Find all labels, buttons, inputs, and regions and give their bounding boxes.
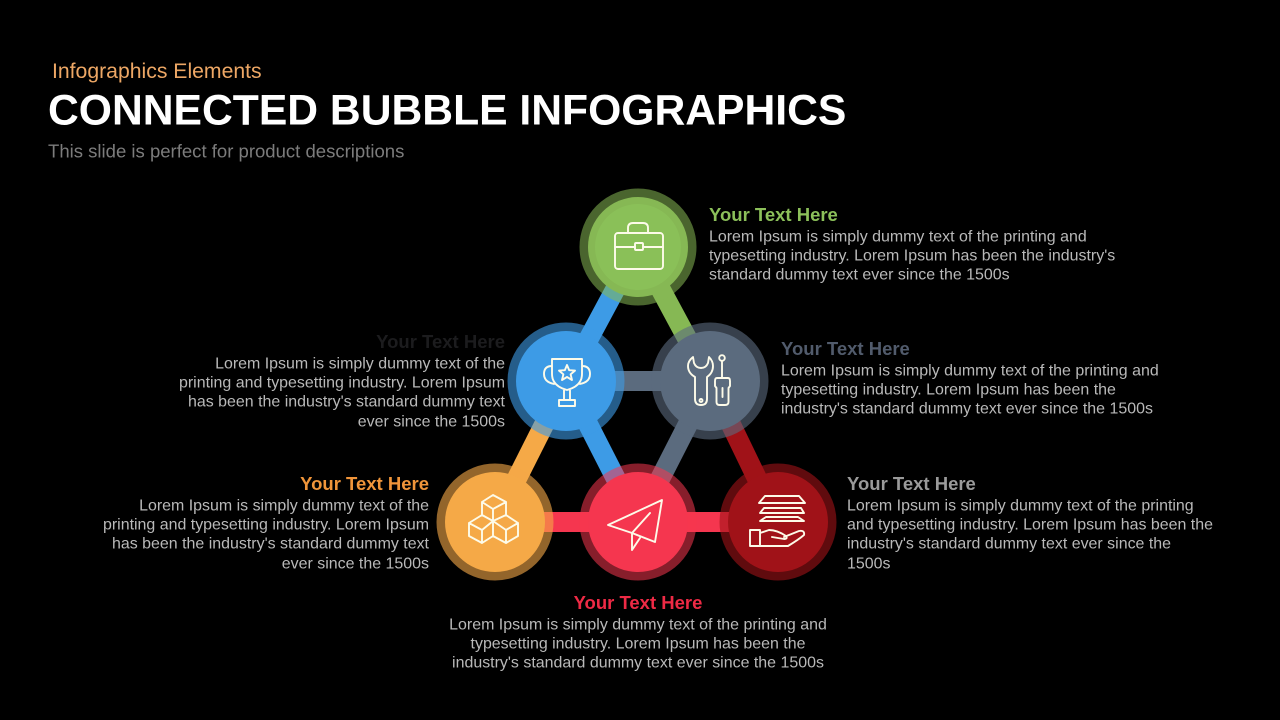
text block: blue: has been the industry's standard dummy text — [188, 394, 506, 410]
bubble: red — [584, 468, 692, 576]
text block: grey: Lorem Ipsum is simply dummy text of the printing and — [781, 362, 1159, 380]
icon: cubes — [469, 495, 518, 543]
text block: orange: has been the industry's standard dummy text — [112, 536, 430, 552]
text block: red: typesetting industry. Lorem Ipsum has been the — [471, 636, 806, 652]
bubble: blue — [512, 327, 620, 435]
text block: blue: printing and typesetting industry. Lorem Ipsum — [179, 374, 505, 392]
text block: blue: Lorem Ipsum is simply dummy text of the — [215, 356, 505, 372]
text block: red — [449, 592, 827, 672]
icon: hand holding layers — [750, 496, 805, 546]
bubble: grey — [656, 327, 764, 435]
text block: dark red: Lorem Ipsum is simply dummy text of the printing — [847, 498, 1194, 514]
text block: red: Lorem Ipsum is simply dummy text of the printing and — [449, 616, 827, 634]
text block: blue: ever since the 1500s — [358, 414, 505, 430]
text block: green: standard dummy text ever since the 1500s — [709, 266, 1010, 284]
icon: paper plane — [608, 500, 662, 550]
text block: red: industry's standard dummy text ever since the 1500s — [452, 654, 824, 672]
title: CONNECTED BUBBLE INFOGRAPHICS — [48, 86, 846, 134]
text block: dark red — [847, 473, 1213, 572]
connectors — [495, 247, 778, 522]
text block: green: Your Text Here — [709, 204, 838, 225]
icon: wrench and screwdriver — [688, 355, 730, 405]
connected bubble diagram — [441, 193, 832, 576]
text block: grey — [781, 338, 1159, 418]
bubble: orange — [441, 468, 549, 576]
text block: grey: industry's standard dummy text ever since the 1500s — [781, 400, 1153, 418]
text block: dark red: and typesetting industry. Lorem Ipsum has been the — [847, 516, 1213, 534]
text block: dark red: industry's standard dummy text ever since the — [847, 536, 1171, 552]
icon: trophy — [544, 359, 590, 406]
text block: grey: Your Text Here — [781, 338, 910, 359]
text block: orange: printing and typesetting industry. Lorem Ipsum — [103, 516, 429, 534]
text block: blue: Your Text Here — [376, 331, 505, 352]
text block: dark red: 1500s — [847, 556, 890, 572]
text block: green: Lorem Ipsum is simply dummy text of the printing and — [709, 228, 1087, 246]
text block: green: typesetting industry. Lorem Ipsum has been the industry's — [709, 248, 1115, 264]
text block: dark red: Your Text Here — [847, 473, 976, 494]
text block: blue — [179, 331, 506, 430]
eyebrow heading: Infographics Elements — [52, 60, 262, 83]
bubble: dark red — [724, 468, 832, 576]
text block: orange: Lorem Ipsum is simply dummy text of the — [139, 498, 429, 514]
text block: orange — [103, 473, 430, 572]
subtitle: This slide is perfect for product descriptions — [48, 140, 404, 162]
text block: grey: typesetting industry. Lorem Ipsum has been the — [781, 382, 1116, 398]
text block: orange: Your Text Here — [300, 473, 429, 494]
text block: orange: ever since the 1500s — [282, 556, 429, 572]
bubble: green — [584, 193, 692, 301]
text block: green — [709, 204, 1115, 284]
text block: red: Your Text Here — [574, 592, 702, 613]
icon: briefcase — [615, 223, 663, 269]
